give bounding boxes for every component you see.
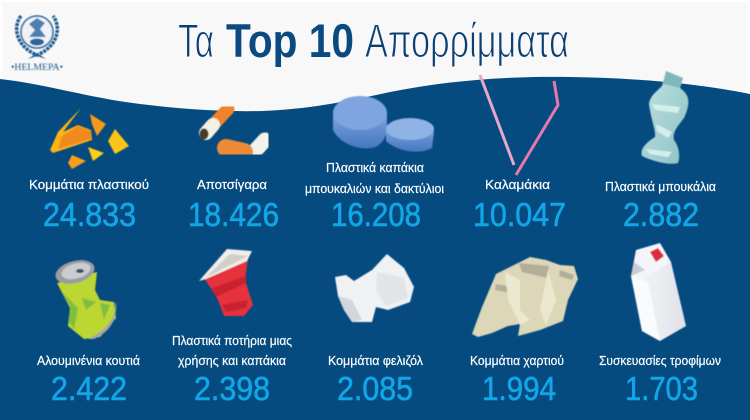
label: Πλαστικά καπάκια: [326, 160, 424, 175]
logo: HELMEPA: [11, 16, 63, 72]
label: Κομμάτια χαρτιού: [470, 353, 564, 368]
item 9: paper: [470, 257, 578, 407]
item 2: cigarette butts: [188, 109, 279, 233]
item 8: styrofoam: [328, 254, 423, 407]
item 3: caps: [305, 96, 444, 233]
item 6: aluminium can: [37, 256, 140, 407]
icon: crumpled paper: [472, 257, 578, 337]
number: 2.882: [623, 196, 699, 233]
title: Top 10: [226, 14, 354, 67]
icon: bottle caps: [333, 96, 434, 152]
number: 1.994: [482, 370, 556, 407]
label: Καλαμάκια: [485, 177, 550, 192]
number: 16.208: [331, 196, 421, 233]
icon: crushed bottle: [642, 71, 688, 164]
label: Συσκευασίες τροφίμων: [599, 353, 721, 368]
item 3: caps: μπουκαλιών και δακτύλιοι: [305, 181, 444, 196]
number: 2.422: [51, 370, 127, 407]
label: Κομμάτια φελιζόλ: [328, 353, 423, 368]
item 5: plastic bottle: [605, 71, 716, 233]
item 10: food packaging: [599, 243, 721, 407]
title: [178, 14, 569, 67]
icon: straws: [480, 75, 558, 175]
icon: crushed can: [53, 256, 116, 339]
item 7: plastic cups: [172, 249, 292, 407]
number: 18.426: [188, 196, 279, 233]
label: Πλαστικά ποτήρια μιας: [172, 333, 292, 348]
icon: crushed cup: [199, 249, 253, 316]
number: 24.833: [43, 196, 136, 233]
label: Κομμάτια πλαστικού: [29, 177, 149, 192]
icon: styrofoam piece: [335, 254, 414, 322]
item 4: straws: [473, 75, 566, 233]
logo: HELMEPA: •HELMEPA•: [11, 62, 63, 72]
icon: milk carton: [631, 243, 686, 341]
number: 2.398: [194, 370, 270, 407]
label: Αποτσίγαρα: [197, 177, 267, 192]
number: 2.085: [337, 370, 413, 407]
title: Τα: [178, 14, 214, 67]
number: 10.047: [473, 196, 566, 233]
label: Πλαστικά μπουκάλια: [605, 179, 716, 194]
icon: cigarette butts: [200, 109, 265, 152]
label: Αλουμινένια κουτιά: [37, 353, 140, 368]
title: Απορρίμματα: [365, 14, 569, 67]
icon: plastic shards: [50, 108, 129, 169]
item 7: plastic cups: χρήσης και καπάκια: [178, 353, 286, 368]
item 1: plastic pieces: [29, 108, 149, 233]
number: 1.703: [625, 370, 698, 407]
